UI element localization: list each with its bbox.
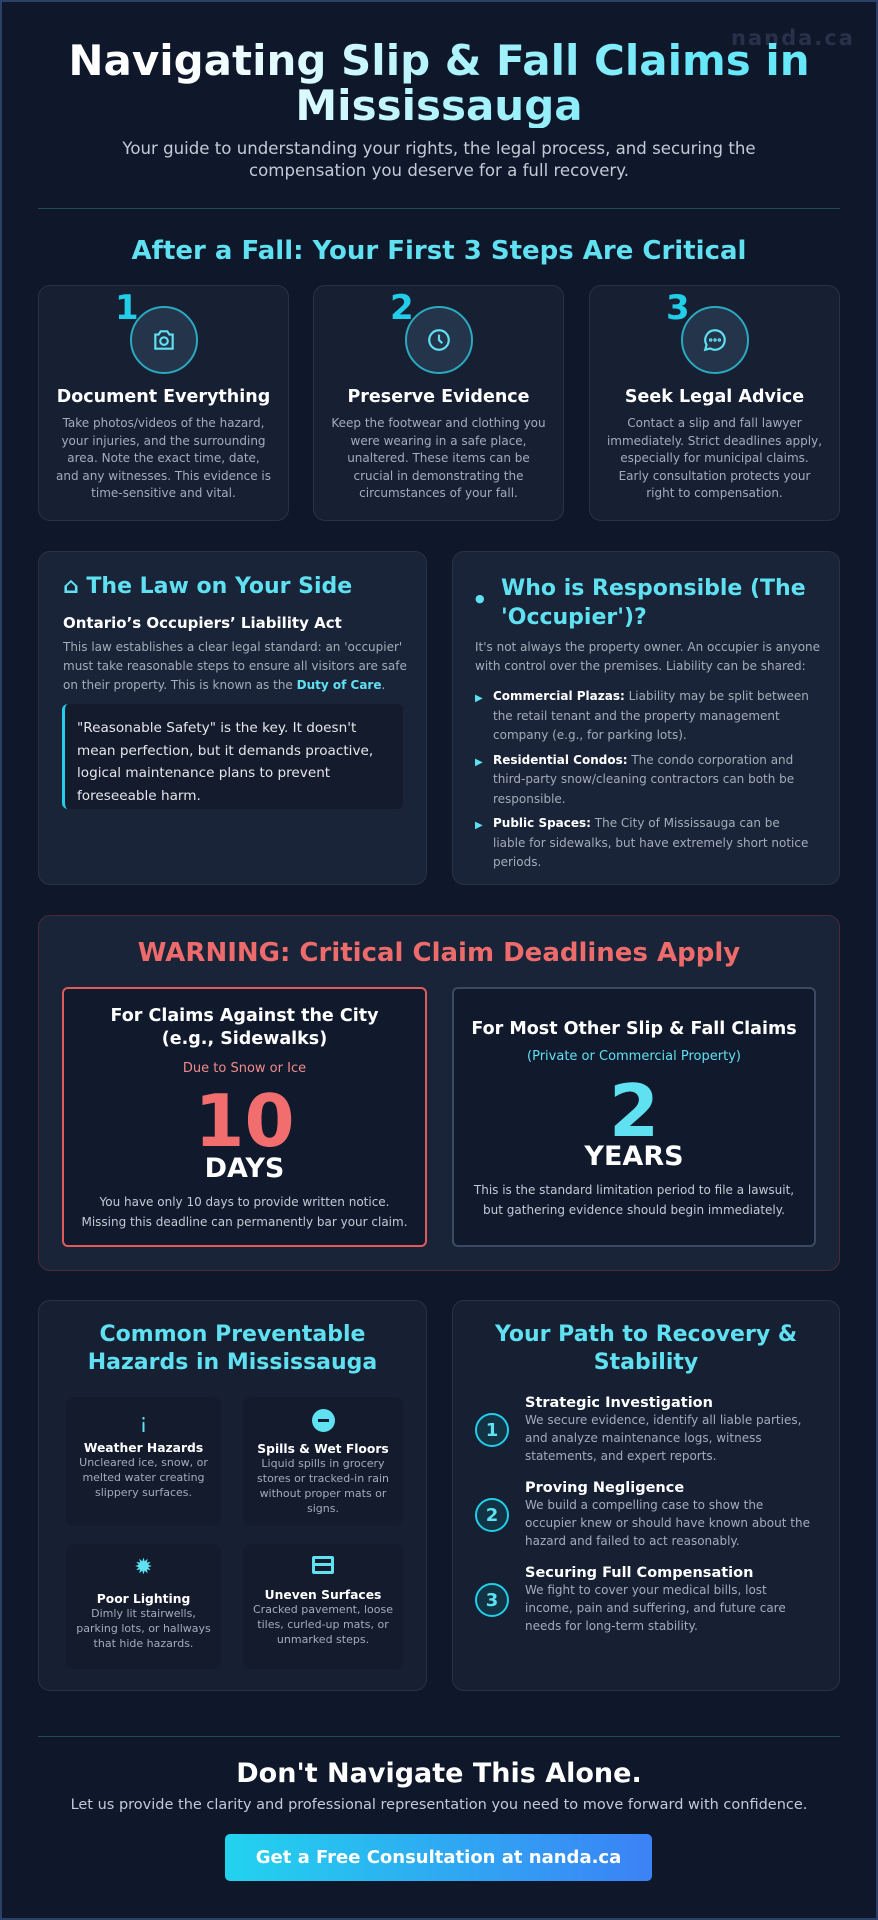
icon: clock: [405, 306, 473, 374]
step: negligence: We build a compelling case to show the occupier knew or should have known about the hazard and failed to act reasonably.: [525, 1498, 810, 1548]
other text: This is the standard limitation period to file a lawsuit,: [474, 1183, 794, 1197]
panel: recovery path: [452, 1300, 840, 1691]
years label: YEARS: [584, 1141, 684, 1172]
warning heading: WARNING: Critical Claim Deadlines Apply: [138, 938, 740, 968]
panel: hazards: [38, 1300, 427, 1691]
title: [0, 38, 878, 128]
title: Mississauga: [295, 81, 583, 130]
step: negligence: [475, 1480, 810, 1548]
step number 2: 2: [390, 288, 414, 328]
bullet list: Residential Condos: The condo corporation and third-party snow/cleaning contractors can both be responsible.: [493, 752, 794, 806]
tile: weather: [66, 1397, 221, 1526]
panel: step 1: [38, 285, 289, 521]
panel: the law: [38, 551, 427, 885]
step: investigation: Strategic Investigation: [525, 1395, 713, 1411]
other text: but gathering evidence should begin immediately.: [483, 1203, 785, 1217]
step: investigation: 1: [486, 1420, 498, 1440]
step: investigation: We secure evidence, identify all liable parties, and analyze maintenance logs, witness statements, and expert reports.: [525, 1413, 801, 1463]
tile: lighting: [66, 1544, 221, 1669]
intro text: It's not always the property owner. An occupier is anyone with control over the premises. Liability can be shared:: [475, 640, 820, 673]
bullet list: ▶: [475, 756, 483, 768]
step title: Preserve Evidence: [347, 387, 530, 407]
subtitle: Your guide to understanding your rights, the legal process, and securing the compensation you deserve for a full recovery.: [122, 139, 756, 180]
button: consultation: [225, 1834, 652, 1881]
subheading: Ontario’s Occupiers’ Liability Act: [63, 614, 342, 632]
hazards heading: [88, 1322, 377, 1375]
tile: uneven: Cracked pavement, loose tiles, curled-up mats, or unmarked steps.: [253, 1603, 393, 1646]
heading: first 3 steps: After a Fall: Your First 3 Steps Are Critical: [132, 236, 746, 266]
step: compensation: We fight to cover your medical bills, lost income, pain and suffering, and future care needs for long-term stability.: [525, 1583, 786, 1633]
tile: weather: Weather Hazards: [84, 1441, 203, 1455]
heading: responsible: Who is Responsible (The 'Occupier')?: [501, 576, 806, 630]
recovery heading: Your Path to Recovery &: [495, 1322, 797, 1347]
tile: uneven: Uneven Surfaces: [265, 1588, 381, 1602]
tile: spills: Liquid spills in grocery stores or tracked-in rain without proper mats or signs.: [257, 1457, 389, 1515]
bullet list: ▶: [475, 820, 483, 831]
step title: Seek Legal Advice: [625, 387, 804, 407]
step: compensation: 3: [486, 1590, 498, 1610]
city sub: Due to Snow or Ice: [183, 1061, 306, 1076]
step: negligence: 2: [486, 1504, 498, 1526]
step: compensation: [475, 1565, 786, 1633]
bullet list: ▶: [475, 693, 483, 704]
step: investigation: [475, 1395, 801, 1463]
footer heading: Don't Navigate This Alone.: [236, 1758, 642, 1789]
bullet list: Commercial Plazas: Liability may be split between the retail tenant and the property management company (e.g., for parking lots).: [493, 689, 809, 742]
tile: spills: [243, 1397, 403, 1526]
tile: uneven: [243, 1544, 403, 1669]
city text: You have only 10 days to provide written notice.: [100, 1195, 390, 1209]
step number 3: 3: [666, 288, 690, 328]
step title: Document Everything: [57, 387, 270, 407]
box: other claims: [452, 987, 816, 1247]
step: compensation: Securing Full Compensation: [525, 1565, 753, 1581]
city title: For Claims Against the City: [110, 1006, 378, 1026]
icon: person: ●: [475, 592, 485, 605]
icon: camera: [130, 306, 198, 374]
panel: step 2: [313, 285, 564, 521]
tile: lighting: Poor Lighting: [97, 1592, 190, 1606]
tile: lighting: Dimly lit stairwells, parking lots, or hallways that hide hazards.: [76, 1607, 211, 1650]
panel: step 3: [589, 285, 840, 521]
box: city claims: [62, 987, 427, 1247]
other sub: (Private or Commercial Property): [527, 1049, 741, 1064]
button: consultation: Get a Free Consultation at nanda.ca: [256, 1847, 621, 1868]
step text: Keep the footwear and clothing you were wearing in a safe place, unaltered. These items can be crucial in demonstrating the circumstances of your fall.: [331, 416, 546, 500]
recovery heading: [494, 1322, 797, 1375]
step: negligence: Proving Negligence: [525, 1480, 684, 1496]
big number 10: 10: [194, 1079, 295, 1163]
watermark: nanda.ca: [731, 26, 855, 50]
big number 2: 2: [609, 1069, 659, 1153]
city title: (e.g., Sidewalks): [162, 1029, 327, 1049]
icon: layers: [312, 1556, 334, 1574]
icon: exclamation: ¡: [139, 1409, 148, 1433]
step text: Take photos/videos of the hazard, your injuries, and the surrounding area. Note the exact time, date, and any witnesses. This evidence is time-sensitive and vital.: [56, 416, 271, 500]
icon: bulb: ✹: [134, 1555, 153, 1580]
hazards heading: Hazards in Mississauga: [88, 1350, 377, 1375]
days label: DAYS: [205, 1153, 284, 1184]
other title: For Most Other Slip & Fall Claims: [471, 1019, 797, 1039]
city title: [110, 1006, 378, 1049]
callout: reasonable safety: [62, 704, 403, 809]
callout: reasonable safety: "Reasonable Safety" is the key. It doesn't mean perfection, but it demands proactive, logical maintenance plans to prevent foreseeable harm.: [77, 720, 373, 804]
icon: chat: [681, 306, 749, 374]
footer text: Let us provide the clarity and professional representation you need to move forward with confidence.: [71, 1797, 807, 1813]
other text: [474, 1183, 794, 1217]
bullet list: Public Spaces: The City of Mississauga can be liable for sidewalks, but have extremely short notice periods.: [493, 816, 808, 869]
step number 1: 1: [115, 288, 139, 328]
step text: Contact a slip and fall lawyer immediately. Strict deadlines apply, especially for municipal claims. Early consultation protects your right to compensation.: [607, 416, 822, 500]
recovery heading: Stability: [594, 1350, 698, 1375]
law text: This law establishes a clear legal standard: an 'occupier' must take reasonable steps to ensure all visitors are safe on their property. This is known as the Duty of Care.: [63, 640, 407, 692]
city text: [81, 1195, 408, 1229]
hazards heading: Common Preventable: [100, 1322, 365, 1347]
panel: who is responsible: [452, 551, 840, 885]
title: Navigating Slip & Fall Claims in: [68, 36, 810, 85]
city text: Missing this deadline can permanently bar your claim.: [81, 1215, 408, 1229]
tile: weather: Uncleared ice, snow, or melted water creating slippery surfaces.: [79, 1456, 208, 1499]
bullet list: [475, 689, 809, 869]
icon: minus circle: [312, 1409, 334, 1432]
heading: law: ⌂ The Law on Your Side: [63, 574, 352, 599]
tile: spills: Spills & Wet Floors: [257, 1442, 389, 1456]
panel: warning deadlines: [38, 915, 840, 1271]
